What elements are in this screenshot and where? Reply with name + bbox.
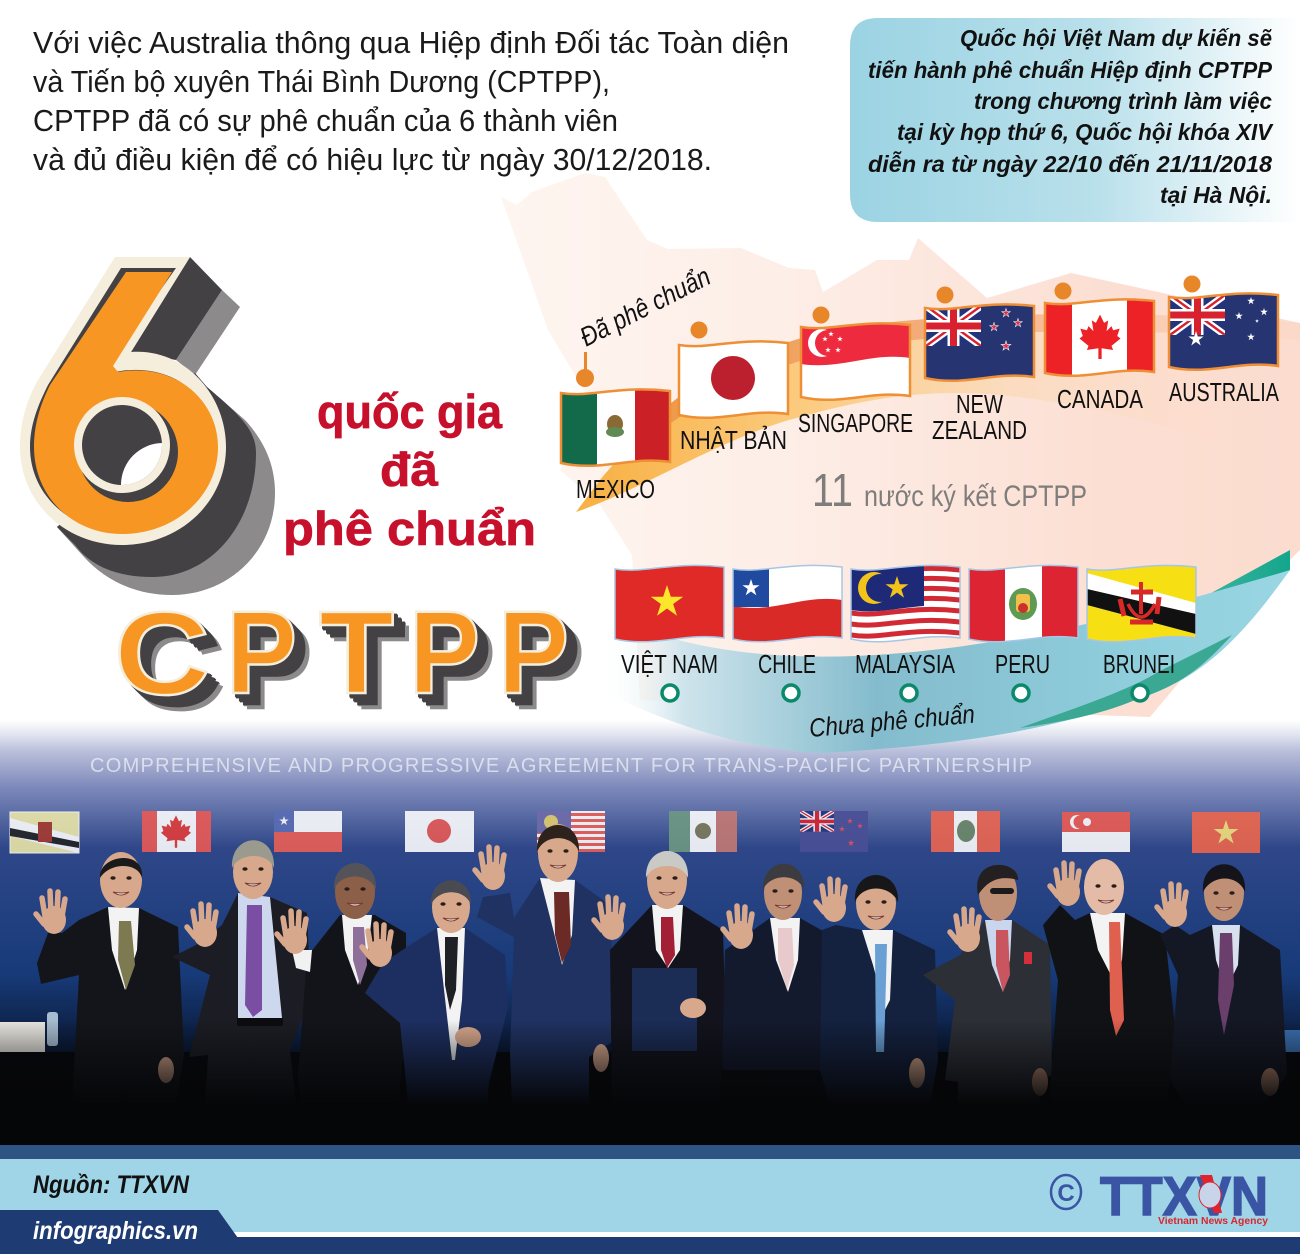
heading: 6 countries ratified: quốc gia bbox=[317, 385, 503, 438]
labels: ratified countries bbox=[576, 377, 1279, 504]
flag: Mexico bbox=[561, 388, 671, 473]
photo: delegate 8 bbox=[816, 875, 938, 1105]
label: ratified (Đã phê chuẩn): Đã phê chuẩn bbox=[575, 261, 715, 352]
flag: Australia bbox=[1169, 292, 1278, 377]
photo: delegate 1 bbox=[36, 852, 184, 1105]
big number 6 bbox=[20, 257, 275, 595]
callout: National Assembly schedule: tiến hành phê chuẩn Hiệp định CPTPP bbox=[868, 57, 1273, 83]
label: not yet ratified (Chưa phê chuẩn): Chưa phê chuẩn bbox=[808, 699, 976, 743]
callout: National Assembly schedule: diễn ra từ ngày 22/10 đến 21/11/2018 bbox=[868, 150, 1272, 177]
intro text block: và Tiến bộ xuyên Thái Bình Dương (CPTPP), bbox=[33, 64, 610, 99]
labels: ratified countries: CANADA bbox=[1057, 384, 1144, 414]
CPTPP wordmark: P bbox=[409, 587, 480, 719]
callout: National Assembly schedule: tại kỳ họp thứ 6, Quốc hội khóa XIV bbox=[897, 119, 1274, 145]
labels: ratified countries: NHẬT BẢN bbox=[680, 425, 787, 455]
photo: delegate 6 with folder bbox=[594, 851, 725, 1105]
water bottle and table bbox=[0, 1012, 1300, 1106]
CPTPP wordmark: P bbox=[498, 587, 569, 719]
flag: Malaysia bbox=[851, 564, 960, 649]
source line: Nguồn: TTXVN bbox=[33, 1171, 190, 1199]
photo: delegate 3 bbox=[277, 863, 406, 1105]
flag: Canada bbox=[1045, 298, 1155, 383]
backdrop flags row bbox=[10, 811, 1260, 853]
backdrop title text: COMPREHENSIVE AND PROGRESSIVE AGREEMENT FOR TRANS-PACIFIC PARTNERSHIP bbox=[90, 755, 1032, 777]
teal ribbon: not yet ratified path bbox=[600, 550, 1290, 753]
labels: ratified countries: SINGAPORE bbox=[798, 408, 913, 438]
logo: TTXVN: Vietnam News Agency bbox=[1158, 1215, 1268, 1227]
intro text block: và đủ điều kiện để có hiệu lực từ ngày 30/12/2018. bbox=[33, 142, 712, 177]
text: 11 signatories: nước ký kết CPTPP bbox=[864, 480, 1087, 513]
photo: delegate 11 bbox=[1157, 864, 1287, 1105]
photo: delegate 5 bbox=[475, 824, 615, 1105]
logo: TTXVN: TTXVN bbox=[1100, 1165, 1268, 1227]
heading: 6 countries ratified: đã bbox=[380, 443, 439, 496]
labels: not yet ratified countries bbox=[621, 649, 1175, 679]
intro text block bbox=[33, 25, 789, 177]
labels: not yet ratified countries: MALAYSIA bbox=[855, 649, 956, 679]
footer band bbox=[0, 1145, 1300, 1254]
intro text block: Với việc Australia thông qua Hiệp định Đối tác Toàn diện bbox=[33, 25, 789, 60]
intro text block: CPTPP đã có sự phê chuẩn của 6 thành viên bbox=[33, 103, 618, 138]
connector stem to Mexico pin bbox=[584, 352, 587, 370]
text: 11 signatories bbox=[812, 464, 1087, 516]
text: 11 signatories: 11 bbox=[812, 464, 853, 516]
labels: not yet ratified countries: PERU bbox=[995, 649, 1050, 679]
flag: New Zealand bbox=[925, 303, 1034, 388]
callout: National Assembly schedule: Quốc hội Việt Nam dự kiến sẽ bbox=[960, 25, 1272, 51]
CPTPP wordmark bbox=[114, 587, 569, 720]
dark fade over lower photo bbox=[0, 1020, 1300, 1106]
labels: not yet ratified countries: BRUNEI bbox=[1103, 649, 1175, 679]
flag: Viet Nam bbox=[615, 564, 724, 649]
CPTPP wordmark: T bbox=[319, 587, 394, 719]
pin dots for ratified countries bbox=[576, 276, 1200, 387]
labels: ratified countries: MEXICO bbox=[576, 474, 655, 504]
heading: 6 countries ratified bbox=[283, 385, 536, 555]
logo: TTXVN: C bbox=[1057, 1180, 1075, 1207]
photo backdrop bbox=[0, 720, 1300, 1145]
photo: delegate 10 bbox=[1043, 859, 1177, 1105]
black floor band bbox=[0, 1105, 1300, 1145]
callout: National Assembly schedule: tại Hà Nội. bbox=[1160, 182, 1272, 208]
flag: Brunei bbox=[1087, 564, 1196, 649]
CPTPP wordmark: C bbox=[114, 588, 210, 720]
callout: National Assembly schedule bbox=[850, 18, 1300, 222]
orange ribbon: ratified path bbox=[576, 314, 1300, 512]
photo: delegate 7 bbox=[722, 864, 830, 1106]
CPTPP wordmark: P bbox=[226, 587, 297, 719]
photo: delegate 9 bbox=[923, 865, 1052, 1105]
labels: ratified countries: NEW bbox=[956, 389, 1003, 419]
background: pale map silhouette bbox=[501, 173, 1300, 717]
pin rings for not yet ratified countries bbox=[662, 685, 1148, 701]
labels: not yet ratified countries: CHILE bbox=[758, 649, 816, 679]
flag: Singapore bbox=[801, 322, 910, 407]
heading: 6 countries ratified: phê chuẩn bbox=[283, 502, 536, 555]
flag: Japan bbox=[679, 340, 788, 425]
callout: National Assembly schedule: trong chương trình làm việc bbox=[974, 88, 1272, 114]
flag: Chile bbox=[733, 564, 842, 649]
labels: ratified countries: ZEALAND bbox=[932, 415, 1027, 445]
website: infographics.vn bbox=[33, 1217, 198, 1245]
photo: delegate 4 bbox=[362, 880, 508, 1105]
photo: delegate 2 bbox=[172, 840, 311, 1105]
flag: Peru bbox=[969, 564, 1078, 649]
labels: not yet ratified countries: VIỆT NAM bbox=[621, 649, 718, 679]
